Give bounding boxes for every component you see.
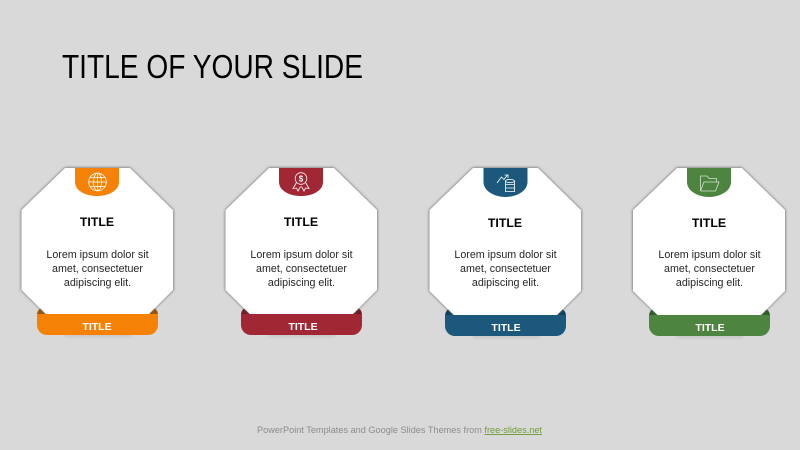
card body text: adipiscing elit. [472, 277, 539, 289]
panel: card 2 red [225, 168, 378, 337]
card body text: Lorem ipsum dolor sit [250, 249, 353, 261]
card body text: amet, consectetuer [664, 263, 755, 275]
bottom bar: orange: TITLE [82, 321, 112, 333]
top tab: red [279, 168, 323, 196]
top tab: green [687, 168, 731, 197]
bottom bar: blue: TITLE [491, 322, 521, 334]
card body text: amet, consectetuer [460, 263, 551, 275]
footer credit: PowerPoint Templates and Google Slides Themes from free-slides.net [257, 425, 542, 435]
card body text: Lorem ipsum dolor sit [658, 249, 761, 261]
bottom bar: orange [37, 314, 158, 335]
card heading: TITLE [80, 215, 114, 229]
bottom bar: red: TITLE [288, 321, 318, 333]
card body text: adipiscing elit. [676, 277, 743, 289]
icon: folder [700, 176, 719, 191]
card body text: Lorem ipsum dolor sit [454, 249, 557, 261]
panel: card 1 orange [21, 168, 174, 337]
icon: chart arrow and coins [497, 175, 514, 192]
bottom bar: green [649, 315, 770, 336]
card heading: TITLE [284, 215, 318, 229]
card body text: adipiscing elit. [268, 277, 335, 289]
top tab: blue [484, 168, 528, 197]
card body text: amet, consectetuer [52, 263, 143, 275]
panel: card 4 green [632, 168, 786, 338]
bottom bar: blue [445, 315, 566, 336]
card heading: TITLE [692, 216, 726, 230]
top tab: orange [75, 168, 119, 196]
icon: award ribbon with dollar: $ [299, 174, 304, 184]
bottom bar: red [241, 314, 362, 335]
icon: award ribbon with dollar [293, 173, 309, 191]
card body text: Lorem ipsum dolor sit [46, 249, 149, 261]
card heading: TITLE [488, 216, 522, 230]
card body text: adipiscing elit. [64, 277, 131, 289]
card body text: amet, consectetuer [256, 263, 347, 275]
title: TITLE OF YOUR SLIDE [62, 48, 363, 85]
icon: globe [89, 173, 106, 191]
bottom bar: green: TITLE [695, 322, 725, 334]
panel: card 3 blue [429, 168, 582, 338]
